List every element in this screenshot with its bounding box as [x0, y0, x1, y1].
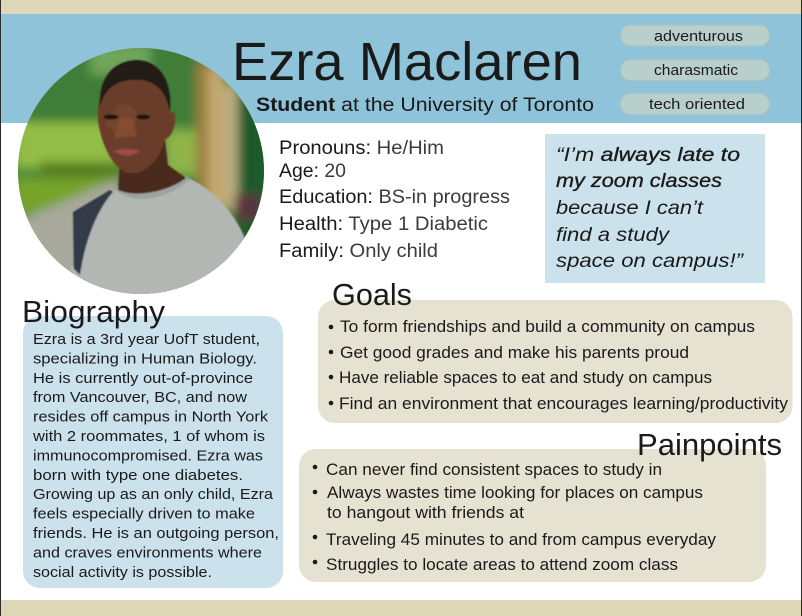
biography panel: from Vancouver, BC, and now — [33, 390, 247, 406]
personal details: Family: Only child — [279, 241, 438, 262]
portrait photo — [15, 45, 270, 300]
biography heading: Biography — [22, 294, 166, 329]
personal details: Education: BS-in progress — [279, 187, 510, 208]
painpoints panel: to hangout with friends at — [327, 503, 524, 522]
bottom beige band — [1, 600, 801, 616]
goals panel: Get good grades and make his parents proud — [340, 343, 689, 362]
biography panel: immunocompromised. Ezra was — [33, 448, 263, 464]
personal details: Age: 20 — [279, 161, 346, 182]
biography panel: friends. He is an outgoing person, — [33, 526, 279, 542]
painpoints panel: Always wastes time looking for places on campus — [327, 483, 703, 502]
goals panel: Find an environment that encourages learning/productivity — [339, 394, 789, 413]
subtitle: Student at the University of Toronto — [256, 95, 594, 116]
trait tags: charasmatic — [654, 62, 739, 79]
head — [98, 72, 175, 173]
biography panel: He is currently out-of-province — [33, 371, 253, 387]
goals panel — [318, 300, 792, 423]
biography panel — [23, 316, 283, 588]
goals heading: Goals — [332, 277, 412, 312]
quote box: “I’m always late to — [556, 144, 740, 166]
biography panel: specializing in Human Biology. — [33, 351, 257, 367]
painpoints panel: Traveling 45 minutes to and from campus everyday — [326, 530, 716, 549]
biography panel: resides off campus in North York — [33, 410, 269, 426]
painpoints heading: Painpoints — [637, 427, 782, 462]
quote box: find a study — [556, 224, 670, 246]
header banner — [1, 14, 801, 123]
quote box: space on campus!” — [556, 250, 745, 272]
quote box — [545, 134, 765, 283]
biography panel: born with type one diabetes. — [33, 468, 243, 484]
painpoints panel — [299, 449, 766, 582]
mouth — [113, 149, 140, 156]
biography panel: Growing up as an only child, Ezra — [33, 487, 274, 503]
personal details: Health: Type 1 Diabetic — [279, 214, 488, 235]
biography panel: social activity is possible. — [33, 565, 212, 581]
personal details: Pronouns: He/Him — [279, 138, 444, 159]
quote box: because I can’t — [556, 197, 705, 219]
painpoints panel: Struggles to locate areas to attend zoom class — [326, 555, 678, 574]
biography panel: and craves environments where — [33, 545, 262, 561]
painpoints panel: Can never find consistent spaces to study in — [326, 460, 662, 479]
biography panel: Ezra is a 3rd year UofT student, — [33, 332, 260, 348]
trait tags — [620, 25, 770, 114]
top beige band — [1, 0, 801, 14]
trait tags: tech oriented — [649, 96, 745, 113]
biography panel: with 2 roommates, 1 of whom is — [32, 429, 265, 445]
goals panel: To form friendships and build a community on campus — [340, 317, 755, 336]
eyes — [104, 114, 118, 120]
strap — [72, 189, 114, 275]
hair — [100, 60, 170, 112]
goals panel: Have reliable spaces to eat and study on campus — [339, 368, 712, 387]
trait tags: adventurous — [654, 28, 743, 45]
neck — [118, 140, 186, 194]
quote box: my zoom classes — [556, 170, 722, 192]
sweater — [70, 179, 250, 300]
name title: Ezra Maclaren — [232, 32, 582, 92]
biography panel: feels especially driven to make — [33, 507, 255, 523]
personal details — [279, 138, 510, 262]
